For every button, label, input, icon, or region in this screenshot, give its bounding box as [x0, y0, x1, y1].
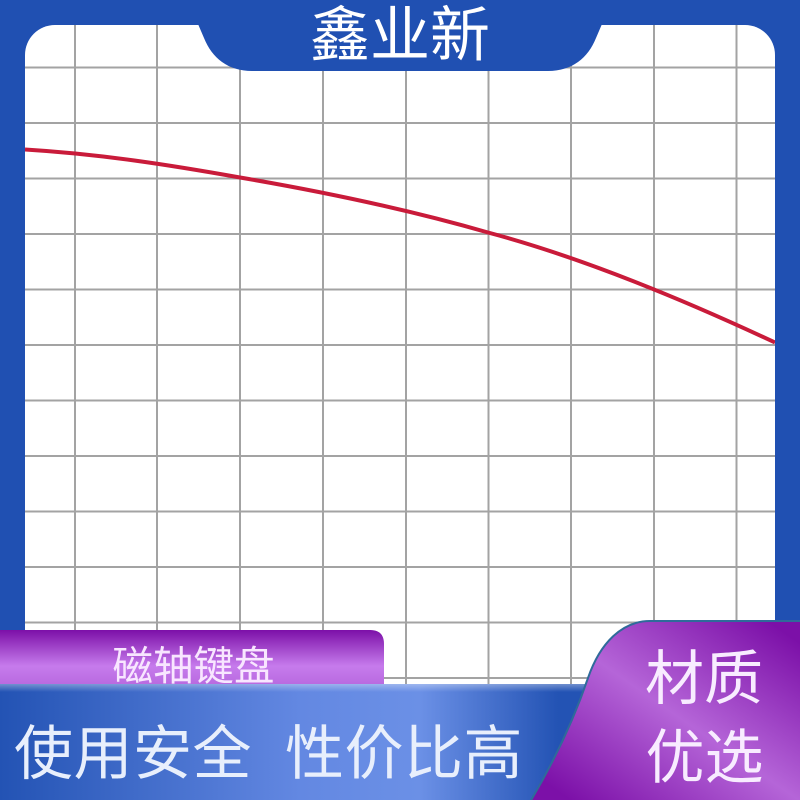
bottom slogan band — [0, 684, 600, 800]
product label text: 磁轴键盘 — [112, 643, 274, 689]
badge text line 2: 优选 — [645, 725, 764, 791]
header tab — [198, 2, 602, 71]
slogan text: 使用安全 — [14, 721, 252, 787]
chart curve — [25, 150, 775, 342]
chart grid — [25, 25, 775, 684]
product label tab — [0, 630, 384, 690]
brand title: 鑫业新 — [310, 2, 490, 69]
corner badge — [530, 621, 800, 800]
panel: line chart — [25, 25, 775, 684]
slogan text 2: 性价比高 — [285, 721, 523, 787]
badge text line 1: 材质 — [645, 646, 763, 712]
